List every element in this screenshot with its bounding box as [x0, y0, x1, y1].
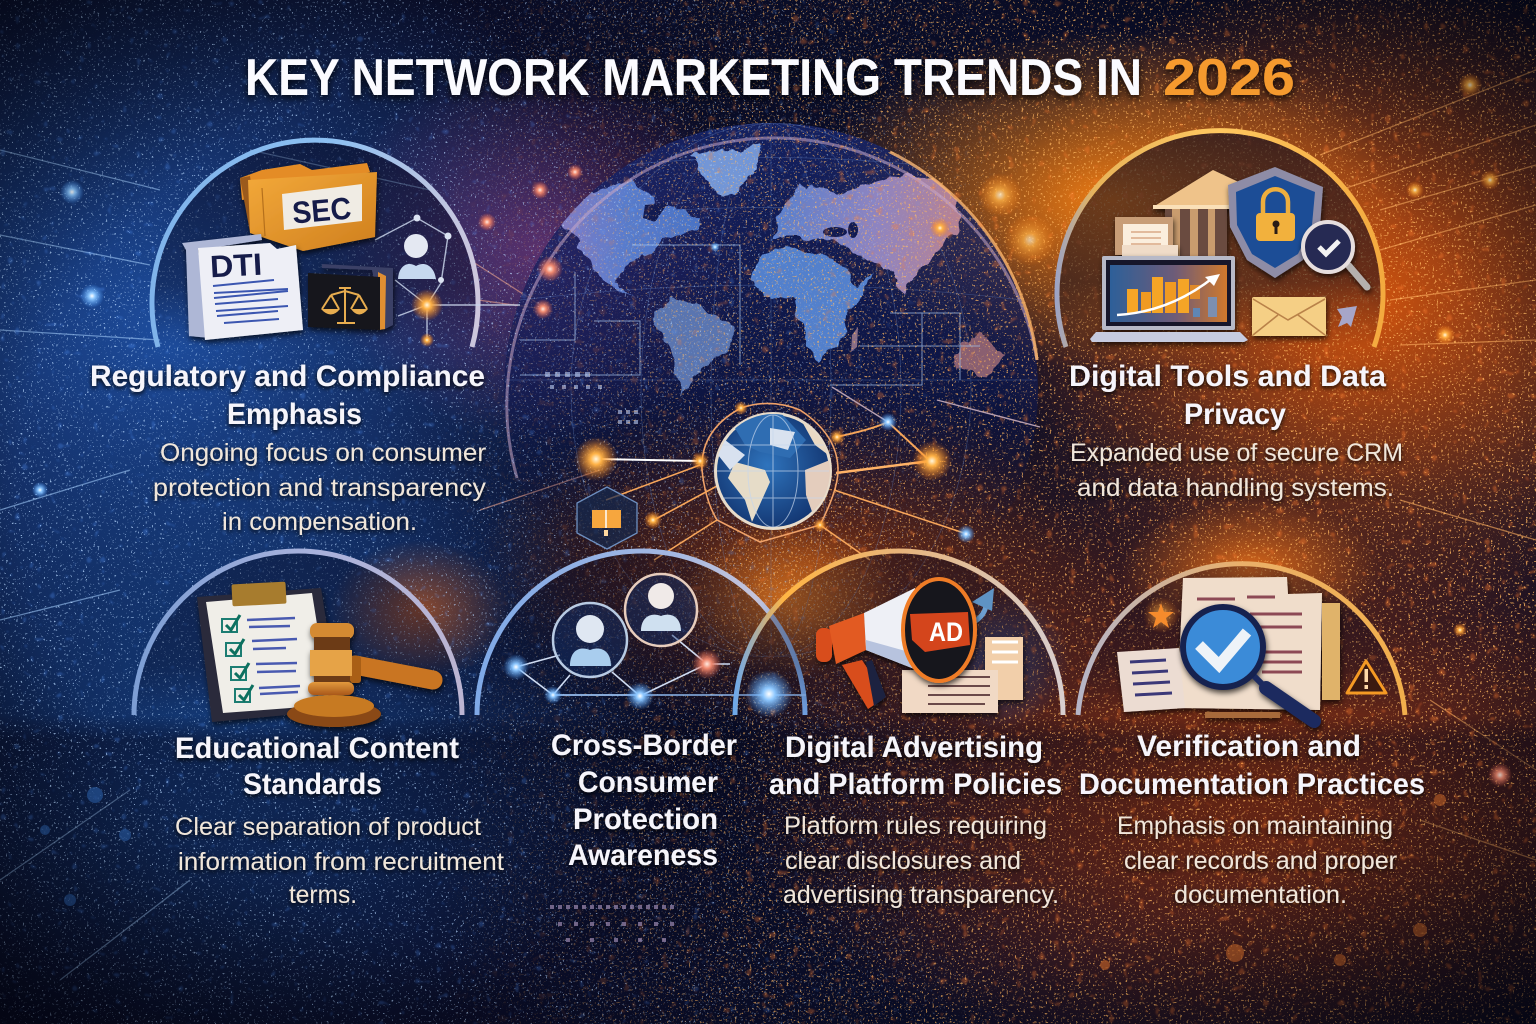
heading: Verification and — [1137, 730, 1361, 763]
body text: Emphasis on maintaining — [1117, 812, 1393, 840]
icon: documents — [1117, 577, 1340, 718]
icon: SEC folder — [240, 163, 377, 251]
icon: upward arrow — [972, 588, 994, 622]
icon: scales of justice book — [308, 264, 393, 330]
panel: digital advertising and platform policies — [735, 551, 1063, 909]
body text: clear disclosures and — [785, 847, 1021, 875]
heading: Standards — [243, 768, 382, 801]
heading: Educational Content — [175, 732, 459, 765]
continents on world map — [548, 146, 1005, 397]
icon: laptop with rising chart — [1090, 256, 1248, 342]
icon: bank building — [1153, 170, 1245, 257]
icon: warning triangle — [1347, 661, 1386, 693]
heading: Awareness — [568, 839, 718, 872]
body text — [153, 439, 487, 536]
panel: regulatory and compliance — [90, 140, 520, 536]
icon: people network — [503, 574, 806, 710]
body text: Clear separation of product — [175, 813, 481, 841]
body text: documentation. — [1174, 881, 1347, 909]
heading: Protection — [573, 803, 718, 836]
body text: in compensation. — [222, 508, 417, 536]
panel: verification and documentation practices — [1078, 564, 1425, 909]
body text: Expanded use of secure CRM — [1070, 439, 1403, 467]
body text — [1070, 439, 1403, 502]
heading: Cross-Border — [551, 729, 737, 762]
central small globe with network nodes — [574, 387, 1040, 560]
heading: Consumer — [578, 766, 718, 799]
world globe map — [504, 123, 1038, 657]
title: 2026 — [1163, 49, 1295, 107]
icon: DTI document: DTI — [209, 247, 263, 284]
heading — [551, 729, 737, 872]
heading: Documentation Practices — [1079, 768, 1425, 801]
body text: and data handling systems. — [1077, 474, 1394, 502]
icon: magnifier with check — [1303, 222, 1367, 287]
body text: advertising transparency. — [783, 881, 1059, 909]
title: KEY NETWORK MARKETING TRENDS IN — [245, 49, 1142, 107]
icon: document stack — [1115, 217, 1178, 257]
heading: Privacy — [1184, 398, 1286, 431]
heading: Regulatory and Compliance — [90, 360, 485, 393]
icon: SEC folder: SEC — [291, 191, 353, 231]
icon: magnifier with check — [1183, 607, 1314, 721]
panel: cross-border consumer protection — [477, 551, 806, 872]
icon: gavel — [287, 623, 433, 727]
icon: small globe — [714, 412, 835, 530]
heading: Digital Advertising — [785, 731, 1043, 764]
heading — [1079, 730, 1425, 801]
heading — [1069, 360, 1386, 431]
body text: terms. — [289, 881, 357, 909]
icon: star badge — [1143, 597, 1179, 633]
icon: hexagon with orange box — [577, 487, 637, 549]
icon: envelope — [1252, 297, 1326, 336]
heading — [769, 731, 1062, 801]
heading: Emphasis — [227, 398, 362, 431]
heading: Digital Tools and Data — [1069, 360, 1386, 393]
panel: educational content standards — [134, 551, 504, 909]
body text: information from recruitment — [178, 848, 504, 876]
heading: and Platform Policies — [769, 768, 1062, 801]
icon: ad documents — [902, 637, 1023, 713]
panel: digital tools and data privacy — [1057, 131, 1403, 502]
icon: shield with lock — [1228, 167, 1323, 278]
heading — [175, 732, 459, 801]
icon: megaphone: AD — [929, 617, 963, 647]
body text: Platform rules requiring — [784, 812, 1047, 840]
icon: megaphone — [816, 579, 975, 709]
icon: DTI document — [182, 234, 303, 340]
body text: protection and transparency — [153, 474, 487, 502]
body text: clear records and proper — [1124, 847, 1397, 875]
icon: network person — [375, 214, 520, 347]
icon: arrow cursor — [1337, 306, 1357, 327]
body text — [175, 813, 504, 909]
body text — [1117, 812, 1397, 909]
body text: Ongoing focus on consumer — [160, 439, 486, 467]
heading — [90, 360, 485, 431]
icon: clipboard checklist — [197, 582, 340, 722]
body text — [783, 812, 1059, 909]
